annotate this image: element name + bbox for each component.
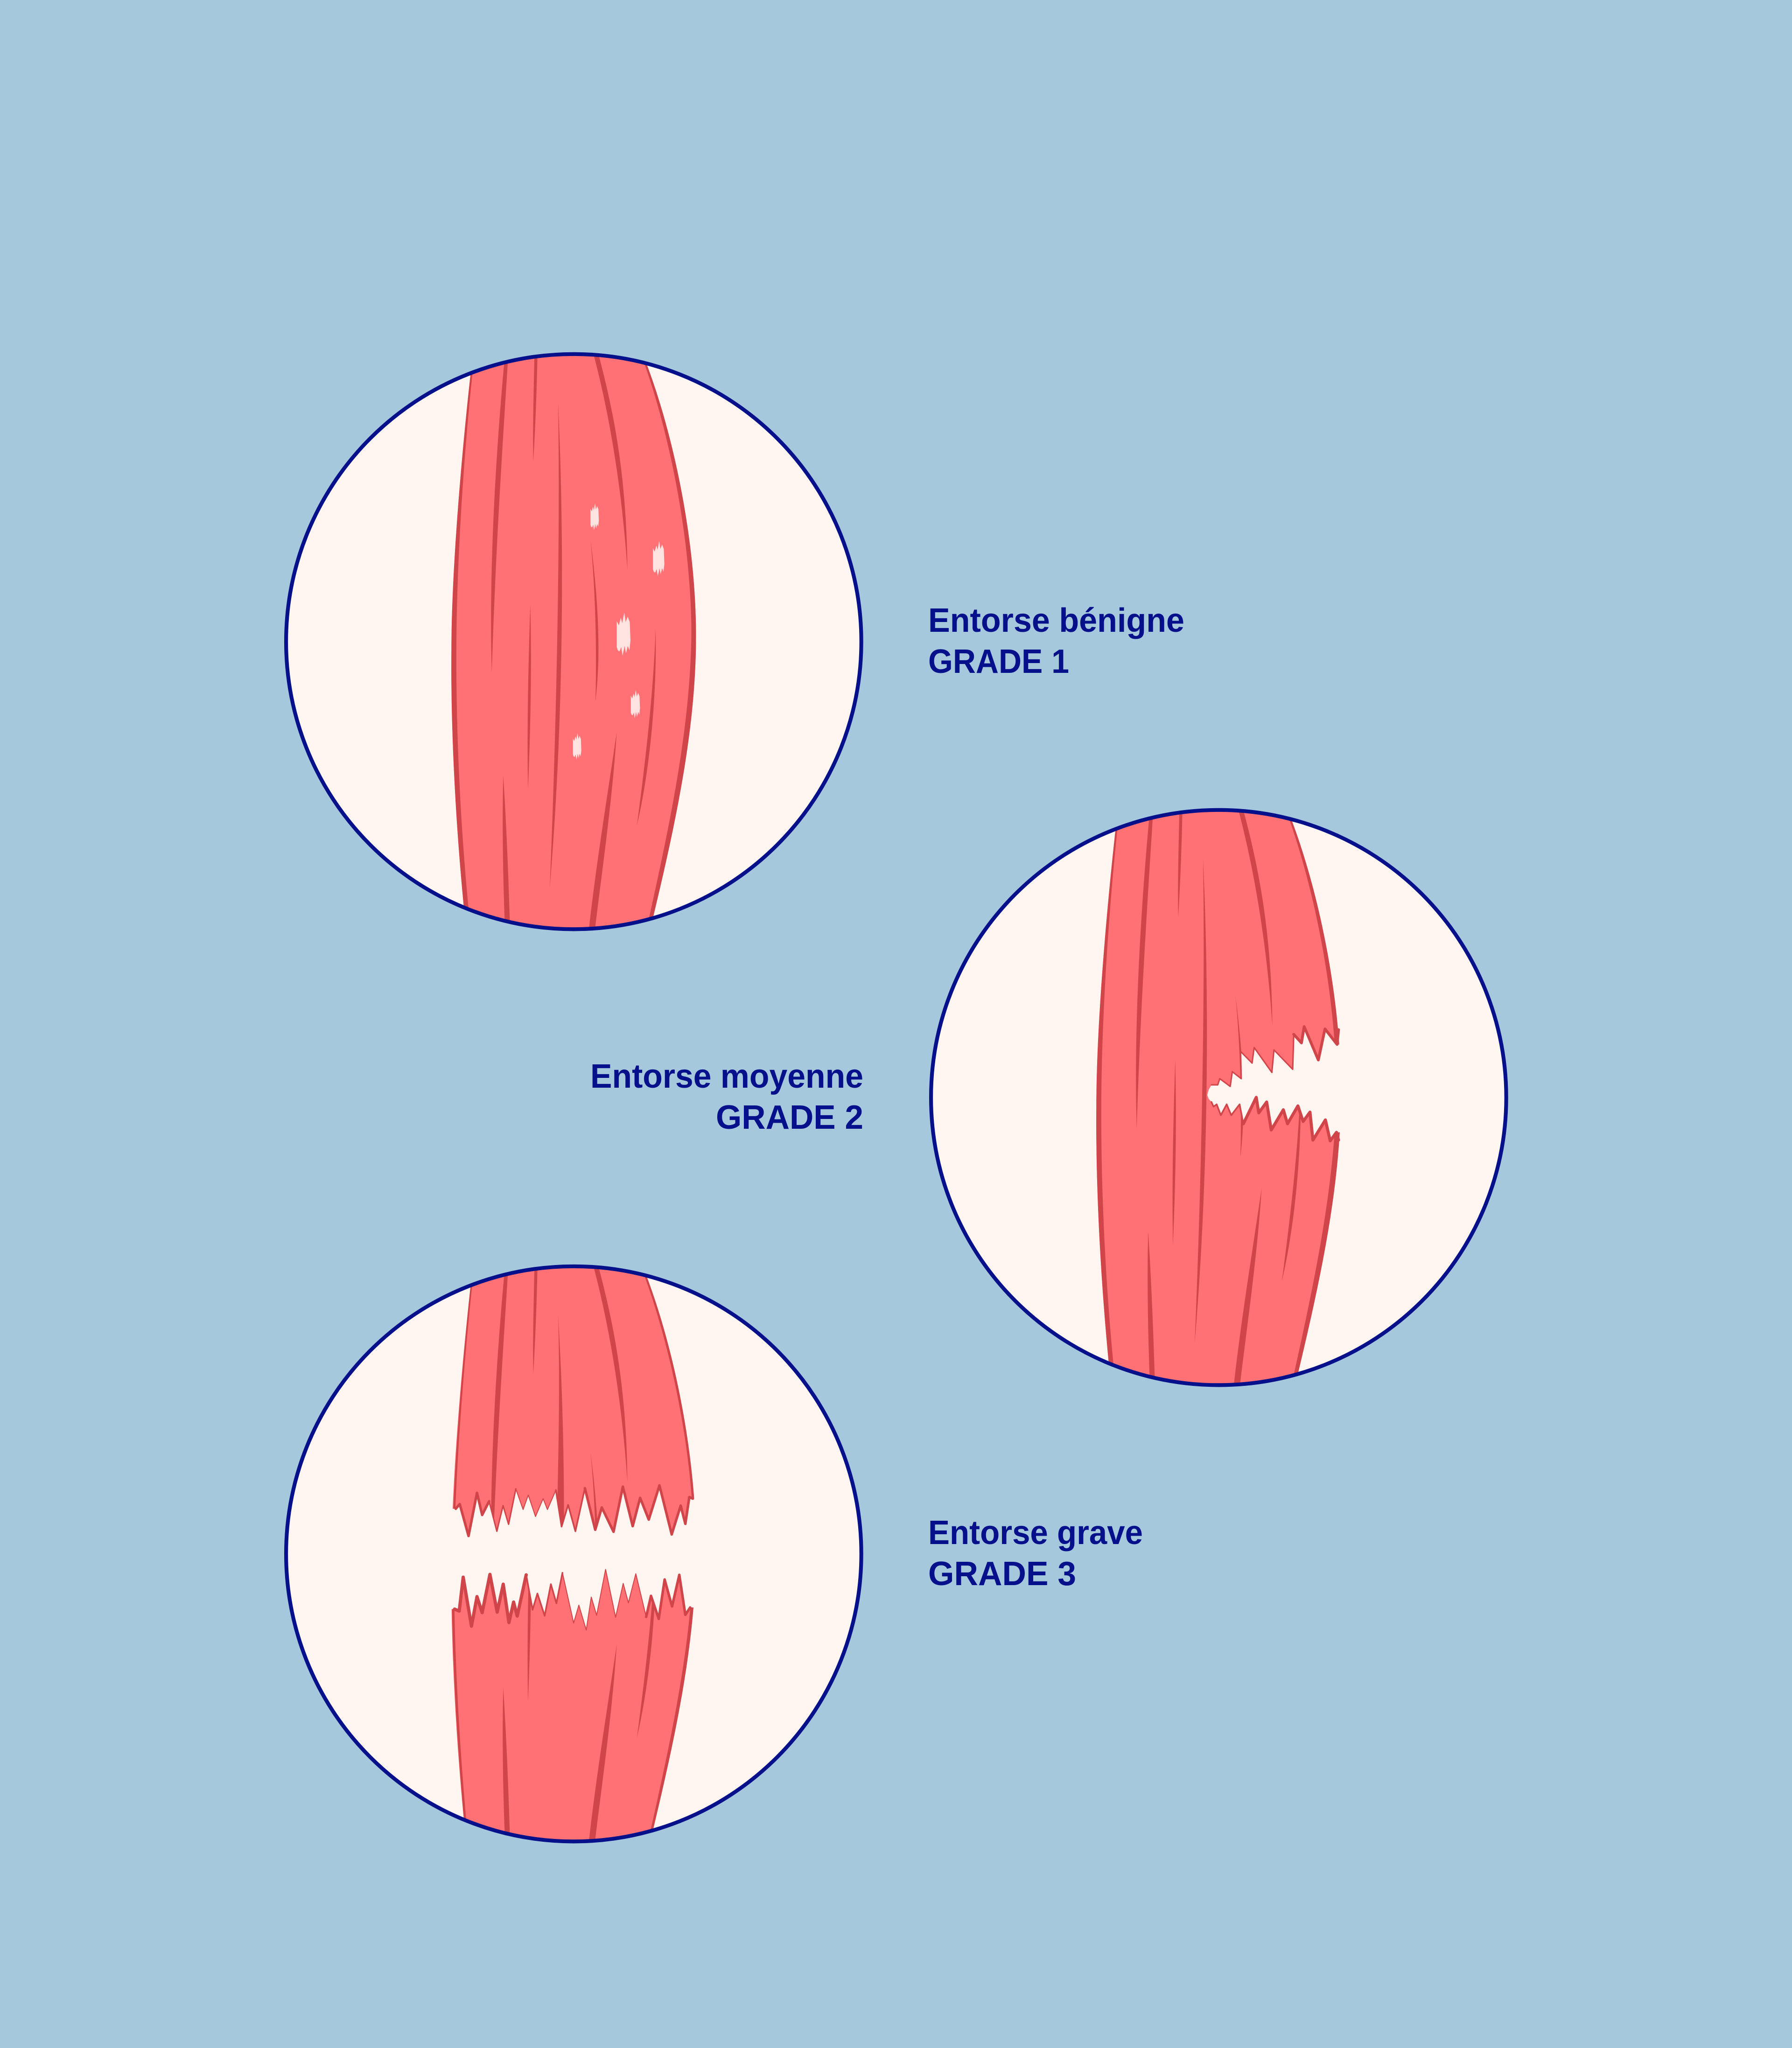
- label: grade 3: GRADE 3: [928, 1555, 1076, 1593]
- panel: grade 2: [590, 797, 1506, 1399]
- label: grade 2: GRADE 2: [716, 1099, 863, 1136]
- tear: partial rupture: [1207, 1027, 1383, 1141]
- label: grade 2: [590, 1058, 863, 1136]
- panel: grade 3: [286, 1254, 1143, 1856]
- illustration: fully ruptured muscle in circle: [286, 1254, 861, 1856]
- label: grade 1: Entorse bénigne: [928, 602, 1184, 639]
- illustration: partially torn muscle in circle: [931, 797, 1506, 1399]
- label: grade 3: [928, 1514, 1143, 1593]
- panel: grade 1: [286, 342, 1184, 944]
- label: grade 1: [928, 602, 1184, 680]
- illustration: muscle with micro tears in circle: [286, 342, 861, 944]
- label: grade 2: Entorse moyenne: [590, 1058, 863, 1095]
- label: grade 3: Entorse grave: [928, 1514, 1143, 1552]
- tear: complete rupture: [436, 1485, 720, 1630]
- label: grade 1: GRADE 1: [928, 643, 1069, 680]
